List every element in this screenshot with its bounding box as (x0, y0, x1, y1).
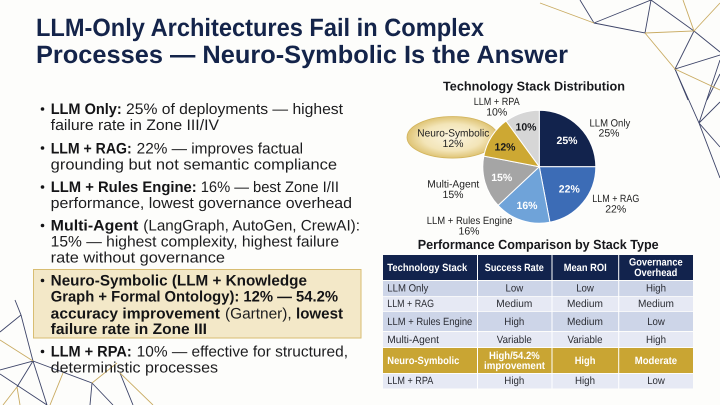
table header row: Technology Stack (387, 262, 467, 274)
row: LLM + Rules Engine: Medium (567, 316, 603, 328)
row: Neuro-Symbolic highlighted: Moderate (635, 355, 677, 367)
pie chart heading: Technology Stack Distribution (443, 79, 625, 94)
bullet: LLM + RPA: deterministic processes (51, 360, 218, 377)
bullet: Multi-Agent: 15% — highest complexity, highest failure (51, 234, 339, 251)
bullet: LLM + RAG: 22% — improves factual (137, 140, 303, 157)
row: LLM + Rules Engine: High (504, 316, 524, 328)
slice values: 15% (491, 172, 513, 184)
slice labels: 22% (605, 204, 626, 216)
table header row: Overhead (634, 267, 677, 279)
bullet: LLM + RPA: 10% — effective for structured, (137, 344, 348, 361)
row: LLM + Rules Engine: LLM + Rules Engine (387, 316, 472, 328)
slice values: 25% (556, 135, 578, 147)
performance comparison table (383, 255, 693, 388)
row: LLM + RPA: High (575, 375, 595, 387)
row: LLM Only: High (646, 283, 666, 295)
row: LLM + RPA: Low (647, 375, 665, 387)
pie slices (483, 110, 596, 223)
bullet: LLM + RAG: LLM + RAG: (51, 140, 132, 157)
row: Multi-Agent (383, 332, 693, 347)
row: LLM + RAG: Medium (638, 298, 674, 310)
table header row: Governance (629, 257, 683, 269)
slice labels: LLM Only (590, 118, 631, 130)
row: Neuro-Symbolic highlighted: improvement (484, 360, 545, 372)
slice labels: 12% (442, 138, 464, 150)
row: Multi-Agent: High (646, 334, 666, 346)
bullet: Multi-Agent: rate without governance (51, 250, 225, 267)
bullet: LLM Only: 25% of deployments — highest (126, 101, 344, 118)
row: Neuro-Symbolic highlighted: High (575, 355, 595, 367)
row: LLM + RPA: LLM + RPA (387, 375, 433, 387)
bullet: LLM + Rules Engine: LLM + Rules Engine: (51, 179, 197, 196)
table header row: Mean ROI (564, 262, 607, 274)
row: LLM + RAG: Medium (567, 298, 603, 310)
row: Neuro-Symbolic highlighted: High/54.2% (489, 350, 540, 362)
slice labels: Multi-Agent (427, 179, 479, 191)
callout: Neuro-Symbolic ellipse (407, 116, 498, 158)
bullet: LLM Only: failure rate in Zone III/IV (51, 117, 220, 134)
slice values: 22% (559, 183, 580, 195)
slice labels: LLM + RAG (592, 193, 639, 205)
highlighted bullet: Neuro-Symbolic: failure rate in Zone III (51, 321, 207, 338)
slice labels: 10% (486, 107, 507, 119)
slice labels: Neuro-Symbolic (417, 128, 489, 140)
bullet: LLM + RPA (41, 344, 348, 377)
bullet: LLM Only: LLM Only: (51, 101, 122, 118)
slice values: 16% (516, 200, 538, 212)
table header row (383, 255, 693, 280)
row: Neuro-Symbolic highlighted (383, 348, 693, 373)
row: LLM + RPA (383, 374, 693, 388)
bullet: LLM Only (41, 101, 344, 134)
title: Processes — Neuro-Symbolic Is the Answer (36, 41, 568, 69)
slice values (491, 122, 580, 212)
highlighted bullet: Neuro-Symbolic: Neuro-Symbolic (LLM + Knowledge (51, 273, 307, 290)
row: Multi-Agent: Multi-Agent (387, 334, 439, 346)
highlighted bullet: Neuro-Symbolic: (Gartner), (225, 305, 292, 322)
row: Multi-Agent: Variable (568, 334, 603, 346)
slice labels: 16% (458, 226, 480, 238)
title: LLM-Only Architectures Fail in Complex (36, 14, 484, 42)
row: LLM + Rules Engine (383, 312, 693, 331)
bullet: Multi-Agent: Multi-Agent (51, 218, 138, 235)
title (36, 14, 568, 69)
bullet: LLM + Rules Engine (41, 179, 352, 212)
bullet: LLM + Rules Engine: 16% — best Zone I/II (201, 179, 339, 196)
pie chart: technology stack distribution (407, 96, 639, 238)
row: LLM Only (383, 281, 693, 296)
bullet: LLM + RAG (41, 140, 337, 173)
row: LLM + Rules Engine: Low (647, 316, 665, 328)
slice values: 12% (494, 141, 516, 153)
row: LLM + RPA: High (504, 375, 524, 387)
slice values: 10% (515, 122, 537, 134)
slice labels: 25% (598, 128, 620, 140)
bullet list: technology stacks (34, 101, 361, 377)
bullet: LLM + RPA: LLM + RPA: (51, 344, 132, 361)
highlighted bullet: Neuro-Symbolic (34, 270, 361, 338)
bullet: LLM + Rules Engine: performance, lowest governance overhead (51, 195, 352, 212)
table heading: Performance Comparison by Stack Type (418, 237, 659, 252)
slice labels: LLM + RPA (474, 96, 520, 108)
highlighted bullet: Neuro-Symbolic: lowest (296, 305, 343, 322)
slice labels: LLM + Rules Engine (427, 215, 513, 227)
slice labels: 15% (442, 189, 464, 201)
row: LLM Only: LLM Only (387, 283, 429, 295)
row: LLM Only: Low (576, 283, 594, 295)
slice labels (417, 96, 639, 238)
row: LLM + RAG: Medium (496, 298, 533, 310)
highlighted bullet: Neuro-Symbolic: accuracy improvement (51, 305, 220, 322)
row: Neuro-Symbolic highlighted: Neuro-Symbolic (387, 355, 459, 367)
table header row: Success Rate (485, 262, 544, 274)
row: LLM + RAG (383, 297, 693, 311)
bullet: Multi-Agent: (LangGraph, AutoGen, CrewAI): (143, 218, 360, 235)
row: Multi-Agent: Variable (497, 334, 532, 346)
highlighted bullet: Neuro-Symbolic: Graph + Formal Ontology): 12% — 54.2% (51, 289, 338, 306)
bullet: Multi-Agent (41, 218, 360, 267)
row: LLM Only: Low (506, 283, 524, 295)
bullet: LLM + RAG: grounding but not semantic compliance (51, 156, 337, 173)
row: LLM + RAG: LLM + RAG (387, 298, 434, 310)
